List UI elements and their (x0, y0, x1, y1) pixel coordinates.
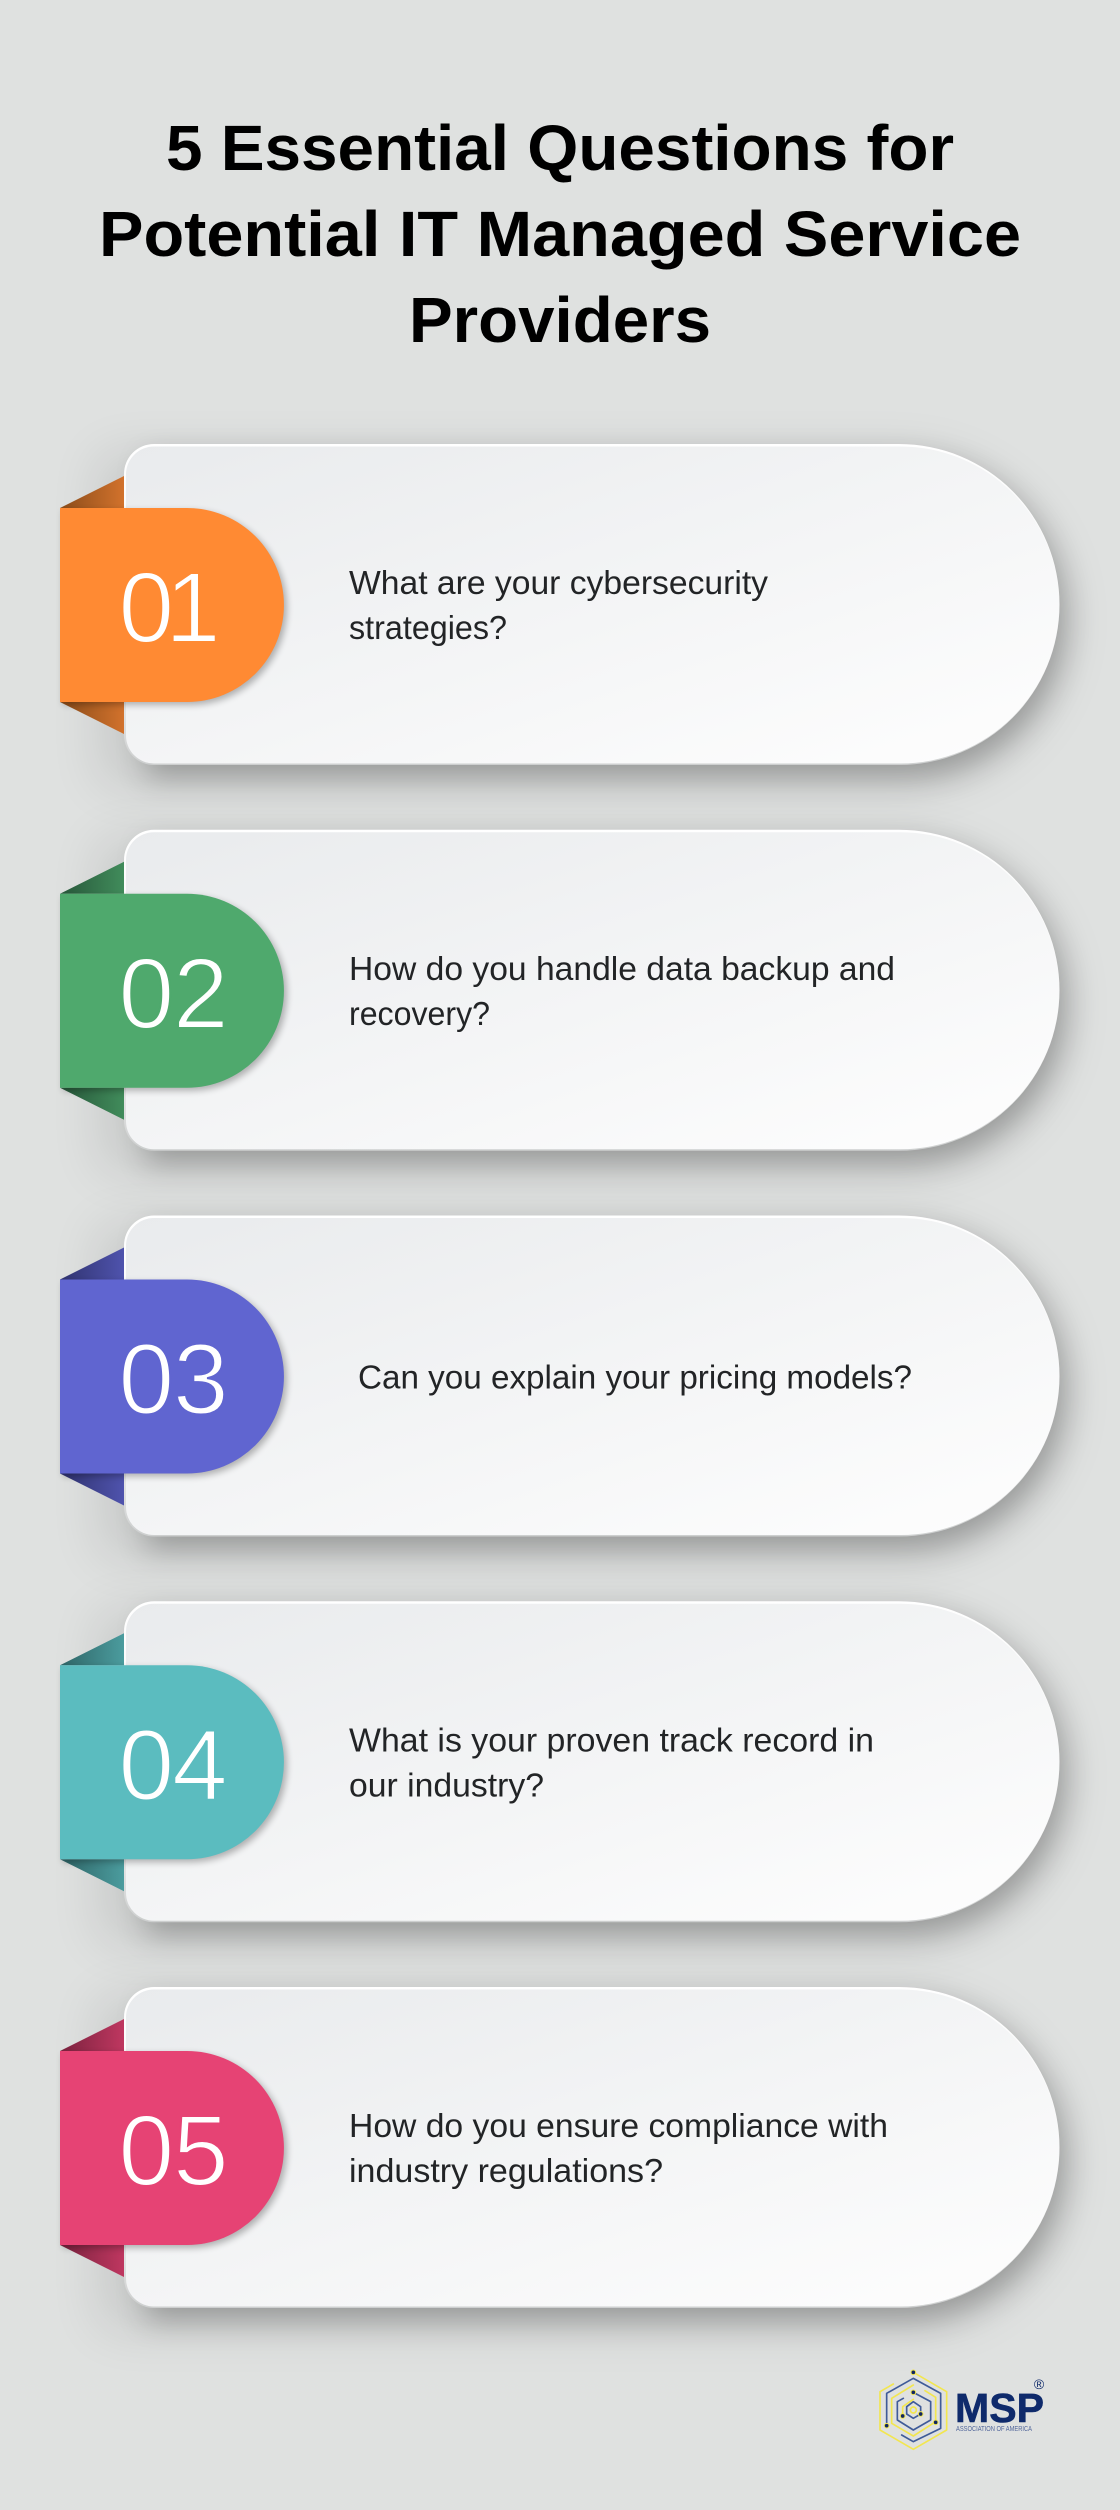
question text 2: recovery? (349, 995, 490, 1032)
panel: question 3 (60, 1216, 1066, 1556)
question text 2 (349, 950, 895, 1032)
number tab 01 (60, 508, 284, 702)
question text 1 (349, 564, 769, 646)
title: Potential IT Managed Service (99, 198, 1021, 270)
question text 5 (349, 2107, 888, 2189)
number tab 02 (60, 894, 284, 1088)
number tab 03 (60, 1280, 284, 1474)
question text 1: What are your cybersecurity (349, 564, 769, 601)
fold: top and bottom ribbon (60, 862, 124, 1120)
number 04: 04 (118, 1709, 228, 1821)
number tab 04 (60, 1665, 284, 1859)
title: 5 Essential Questions for (166, 112, 954, 184)
panel: question 2 (60, 830, 1066, 1171)
logo tagline: ASSOCIATION OF AMERICA (956, 2424, 1032, 2433)
fold: top and bottom ribbon (60, 1248, 124, 1506)
fold: top and bottom ribbon (60, 476, 124, 734)
question text 3: Can you explain your pricing models? (358, 1358, 912, 1396)
question text 1: strategies? (349, 609, 507, 646)
fold: top and bottom ribbon (60, 2019, 124, 2277)
number 03: 03 (118, 1324, 229, 1436)
icon: hexagon circuit mark (880, 2370, 947, 2449)
number 05: 05 (118, 2095, 229, 2207)
question text 5: industry regulations? (349, 2152, 663, 2189)
fold: top and bottom ribbon (60, 1633, 124, 1891)
number 02: 02 (118, 938, 229, 1050)
panel: question 5 (60, 1987, 1066, 2328)
panel: question 4 (60, 1601, 1066, 1942)
number 01: 01 (118, 552, 221, 664)
question text 4: What is your proven track record in (349, 1721, 874, 1758)
question text 2: How do you handle data backup and (349, 950, 895, 987)
title: Providers (409, 284, 711, 356)
logo wordmark: MSP (955, 2385, 1044, 2431)
question text 4 (349, 1721, 874, 1803)
registered mark: ® (1034, 2376, 1045, 2392)
number tab 05 (60, 2051, 284, 2245)
question text 5: How do you ensure compliance with (349, 2107, 888, 2144)
panel: question 1 (60, 444, 1066, 785)
logo: MSP Association of America (880, 2370, 1045, 2449)
title (99, 112, 1021, 356)
question text 4: our industry? (349, 1766, 544, 1803)
